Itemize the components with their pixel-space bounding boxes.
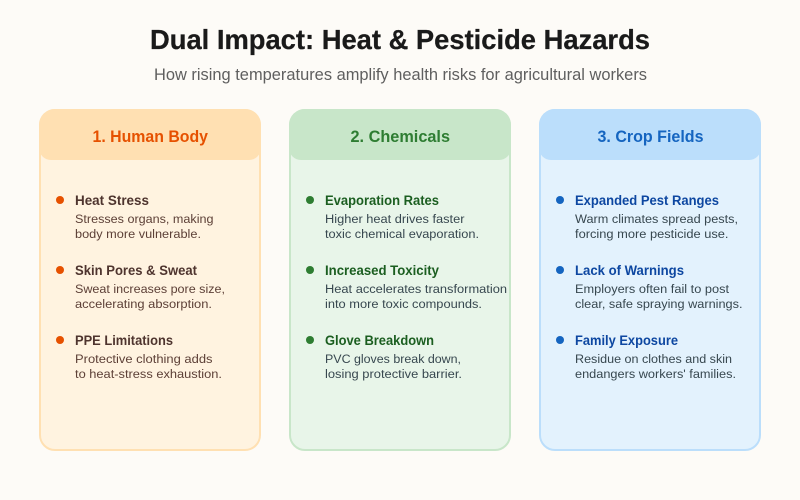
subtitle: How rising temperatures amplify health risks for agricultural workers [154,66,647,84]
panel header: human body [39,109,261,160]
item: ppe limitations [56,333,222,381]
item: increased toxicity: into more toxic compounds. [325,297,482,311]
item: lack of warnings: Lack of Warnings [575,263,684,278]
panel header: crop fields [539,109,761,160]
item: skin pores and sweat: Skin Pores & Sweat [75,263,198,278]
item: increased toxicity: Heat accelerates transformation [325,282,507,296]
item: heat stress: Stresses organs, making [75,212,214,226]
item: ppe limitations: PPE Limitations [75,333,173,348]
item: heat stress: body more vulnerable. [75,227,201,241]
item: evaporation rates [306,193,479,241]
item: glove breakdown: Glove Breakdown [325,333,434,348]
item: increased toxicity: Increased Toxicity [325,263,440,278]
item: family exposure: endangers workers' families. [575,367,736,381]
item: glove breakdown: PVC gloves break down, [325,352,461,366]
panel header: chemicals: 2. Chemicals [350,128,450,146]
item: evaporation rates: Evaporation Rates [325,193,439,208]
item: lack of warnings: Employers often fail to post [575,282,730,296]
item: heat stress: Heat Stress [75,193,149,208]
panel header: crop fields: 3. Crop Fields [598,128,704,146]
item: heat stress [56,193,214,241]
item: skin pores and sweat: Sweat increases pore size, [75,282,225,296]
item: increased toxicity [306,263,507,311]
item: skin pores and sweat: accelerating absorption. [75,297,212,311]
item: family exposure: Family Exposure [575,333,678,348]
title: Dual Impact: Heat & Pesticide Hazards [150,24,650,55]
panel header: human body: 1. Human Body [92,128,209,146]
item: skin pores and sweat [56,263,225,311]
item: evaporation rates: Higher heat drives faster [325,212,464,226]
item: lack of warnings: clear, safe spraying warnings. [575,297,742,311]
item: family exposure [556,333,736,381]
item: expanded pest ranges [556,193,738,241]
panel: human body [39,109,261,450]
panel header: chemicals [289,109,511,160]
item: glove breakdown [306,333,462,381]
panel: chemicals [289,109,511,450]
item: expanded pest ranges: Expanded Pest Ranges [575,193,719,208]
item: family exposure: Residue on clothes and skin [575,352,732,366]
item: glove breakdown: losing protective barrier. [325,367,462,381]
item: ppe limitations: Protective clothing adds [75,352,212,366]
item: lack of warnings [556,263,742,311]
item: expanded pest ranges: Warm climates spread pests, [575,212,738,226]
item: ppe limitations: to heat-stress exhaustion. [75,367,222,381]
panel: crop fields [539,109,761,450]
item: evaporation rates: toxic chemical evaporation. [325,227,479,241]
item: expanded pest ranges: forcing more pesticide use. [575,227,728,241]
